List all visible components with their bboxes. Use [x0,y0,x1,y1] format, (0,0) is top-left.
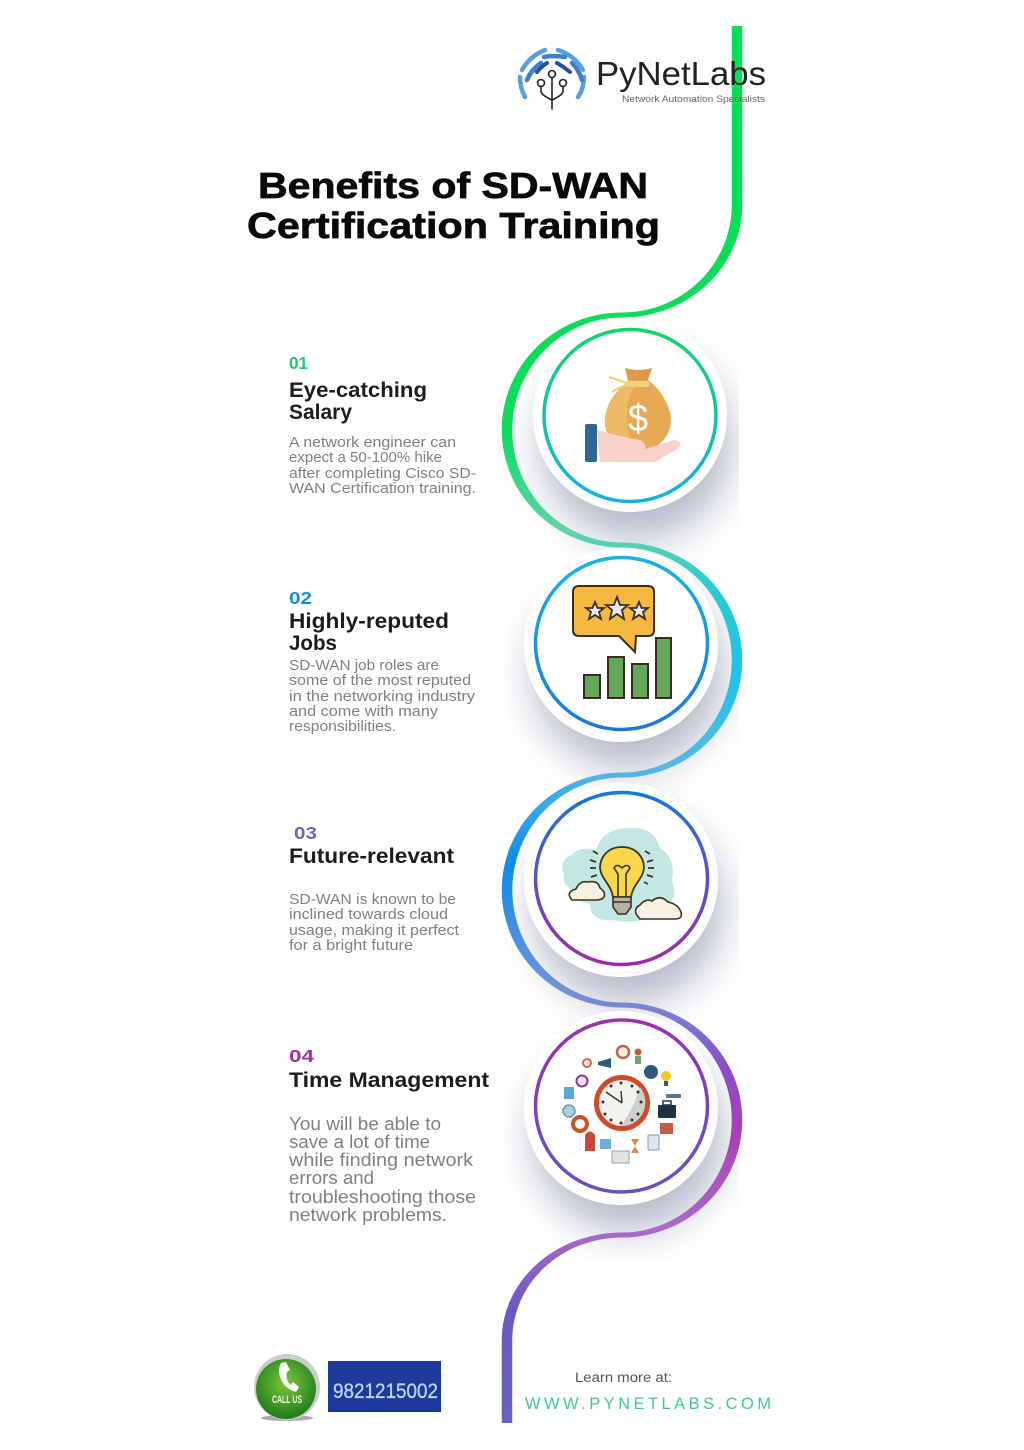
icon: rating bubble and bars [573,586,671,698]
call us button [254,1354,320,1421]
body text: some of the most reputed [289,673,471,689]
circle 3: future [524,783,718,977]
phone number [328,1361,441,1412]
flowing gradient line [502,26,742,1423]
body text: inclined towards cloud [289,907,448,923]
logo tagline: Network Automation Specialists [622,94,766,104]
body text: You will be able to [289,1114,441,1134]
body text: errors and [289,1168,374,1188]
icon: light bulb and clouds [562,828,681,922]
heading [289,379,427,424]
number 04: 04 [289,1046,314,1066]
heading: Time Management [289,1069,489,1092]
heading: Highly-reputed [289,610,449,633]
body text: for a bright future [289,938,413,954]
body text: SD-WAN is known to be [289,892,456,908]
title [247,165,660,246]
body text: save a lot of time [289,1132,430,1152]
body text: WAN Certification training. [289,481,476,497]
body text: in the networking industry [289,689,476,705]
body text [289,892,459,954]
body text: while finding network [288,1150,474,1170]
body text: usage, making it perfect [289,923,459,939]
heading: Jobs [289,632,337,655]
call us button: CALL US [272,1394,302,1406]
body text [289,435,476,497]
heading [289,610,449,655]
panel: 01 Eye-catching Salary text [289,353,476,497]
body text [288,1114,476,1225]
body text [289,658,476,735]
body text: and come with many [289,704,439,720]
body text: A network engineer can [289,435,456,451]
body text: network problems. [289,1205,447,1225]
logo name: PyNetLabs [596,55,766,92]
body text: SD-WAN job roles are [289,658,439,674]
learn more text: Learn more at: [575,1370,672,1385]
number 02: 02 [289,588,312,608]
website url: WWW.PYNETLABS.COM [525,1395,771,1413]
circle 4: time [524,1011,718,1205]
panel: 02 Highly-reputed Jobs text [289,588,476,735]
heading: Eye-catching [289,379,427,402]
number 03: 03 [294,823,317,843]
body text: expect a 50-100% hike [289,450,442,466]
body text: troubleshooting those [289,1187,476,1207]
title: Certification Training [247,205,660,246]
body text: responsibilities. [289,719,396,735]
circle 2: jobs [524,548,718,742]
logo icon [520,50,584,109]
circle drop shadows [533,350,731,1231]
panel: 04 Time Management text [288,1046,489,1225]
logo [520,50,766,109]
phone number: 9821215002 [333,1380,438,1403]
body text: after completing Cisco SD- [289,466,476,482]
heading: Salary [289,401,352,424]
panel: 03 Future-relevant text [289,823,459,954]
number 01: 01 [289,353,308,373]
icon: money bag on hand: $ [628,398,648,440]
circle 1: salary [533,318,727,512]
title: Benefits of SD-WAN [258,165,648,206]
icon: clock and surrounding icons [563,1046,681,1163]
heading: Future-relevant [289,845,454,868]
icon: money bag on hand [585,368,680,462]
